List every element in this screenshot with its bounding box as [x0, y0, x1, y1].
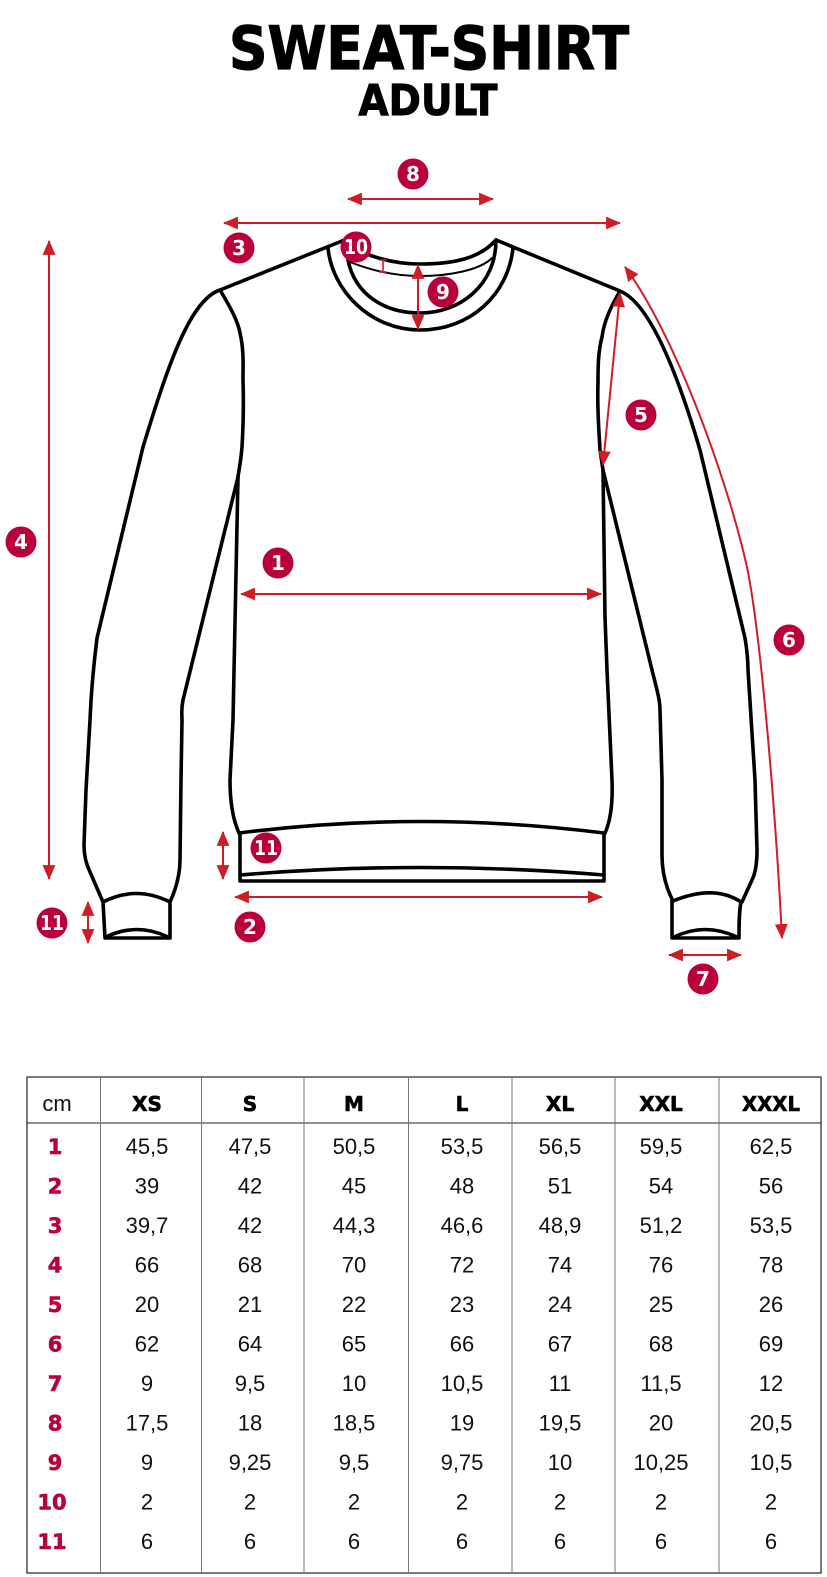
badge 9 [428, 276, 458, 308]
badge 5: 5 [634, 403, 648, 427]
badge 8: 8 [406, 162, 420, 186]
row 5: 24 [548, 1292, 572, 1317]
row 8: 19,5 [539, 1410, 581, 1436]
row 5: 23 [450, 1292, 474, 1317]
row 9 [48, 1450, 792, 1475]
row 1: 47,5 [229, 1134, 271, 1159]
row 10: 10 [37, 1490, 67, 1514]
row 6 [48, 1332, 783, 1356]
badge 4: 4 [14, 530, 28, 554]
row 1: 62,5 [750, 1134, 792, 1159]
table header: XXL [639, 1092, 683, 1116]
row 11: 6 [554, 1529, 566, 1554]
row 11: 6 [456, 1529, 468, 1554]
row 6: 65 [342, 1332, 366, 1356]
table header: S [243, 1092, 257, 1116]
row 2: 54 [649, 1174, 673, 1198]
row 11: 6 [348, 1529, 360, 1554]
row 11 [37, 1529, 777, 1554]
row 3: 53,5 [750, 1213, 792, 1238]
row 10: 2 [456, 1490, 468, 1514]
row 3: 42 [238, 1213, 262, 1238]
row 3 [48, 1213, 792, 1238]
size table [27, 1077, 821, 1573]
row 8 [48, 1410, 792, 1436]
arrow: 9 neck drop [417, 265, 419, 329]
row 9: 9,75 [441, 1450, 483, 1475]
arrow: 7 cuff width [669, 954, 741, 956]
badge 6 [774, 624, 804, 656]
row 7: 9,5 [235, 1371, 265, 1396]
badge 1 [262, 548, 294, 578]
table header: XXXL [742, 1092, 800, 1116]
row 1: 59,5 [640, 1134, 682, 1159]
row 7: 9 [141, 1371, 153, 1396]
arrow: 3 shoulder width [224, 222, 620, 224]
row 9: 9,25 [229, 1450, 271, 1475]
badge 9: 9 [436, 280, 450, 304]
row 7: 10 [342, 1371, 366, 1396]
arrow: 11 cuff height [87, 902, 89, 943]
row 4 [48, 1252, 783, 1278]
row 7: 7 [48, 1372, 62, 1396]
row 8: 20,5 [750, 1410, 792, 1436]
row 1: 53,5 [441, 1134, 483, 1159]
row 4: 76 [649, 1252, 673, 1278]
arrow: 6 sleeve length [625, 267, 782, 938]
badge 11 cuff: 11 [40, 911, 64, 935]
row 9: 9 [48, 1451, 62, 1475]
row 7: 11,5 [640, 1371, 682, 1396]
row 10 [37, 1490, 777, 1514]
row 10: 2 [244, 1490, 256, 1514]
row 8: 17,5 [126, 1410, 168, 1436]
badge 2: 2 [243, 915, 257, 939]
sweatshirt outline [84, 240, 757, 938]
badge 10 [340, 232, 372, 262]
row 3: 39,7 [126, 1213, 168, 1238]
row 2: 2 [48, 1174, 62, 1198]
row 10: 2 [141, 1490, 153, 1514]
row 1: 45,5 [126, 1134, 168, 1159]
badge 10: 10 [344, 235, 368, 259]
row 3: 44,3 [333, 1213, 375, 1238]
row 8: 20 [649, 1410, 673, 1436]
row 6: 64 [238, 1332, 262, 1356]
row 5: 22 [342, 1292, 366, 1317]
badge 6: 6 [782, 628, 796, 652]
badge 7: 7 [696, 967, 710, 991]
row 2: 51 [548, 1174, 572, 1198]
row 8: 18 [238, 1410, 262, 1436]
row 5: 25 [649, 1292, 673, 1317]
table header: XS [132, 1092, 162, 1116]
row 3: 3 [48, 1214, 62, 1238]
arrow: 10 collar height [379, 260, 387, 272]
row 2: 48 [450, 1174, 474, 1198]
arrow: 1 chest width [241, 593, 601, 595]
row 2 [48, 1174, 783, 1198]
row 11: 6 [655, 1529, 667, 1554]
row 10: 2 [554, 1490, 566, 1514]
row 4: 70 [342, 1252, 366, 1278]
row 1: 56,5 [539, 1134, 581, 1159]
row 2: 39 [135, 1174, 159, 1198]
row 5: 26 [759, 1292, 783, 1317]
table header: L [456, 1092, 469, 1116]
row 11: 6 [244, 1529, 256, 1554]
row 5: 21 [238, 1292, 262, 1317]
table header: cm [42, 1091, 72, 1116]
row 4: 72 [450, 1252, 474, 1278]
row 11: 6 [141, 1529, 153, 1554]
row 10: 2 [765, 1490, 777, 1514]
row 1 [48, 1134, 792, 1159]
badge 11 hem: 11 [254, 836, 278, 860]
arrow: 2 hem width [235, 896, 602, 898]
row 10: 2 [655, 1490, 667, 1514]
row 6: 69 [759, 1332, 783, 1356]
row 9: 9,5 [339, 1450, 369, 1475]
row 7: 10,5 [441, 1371, 483, 1396]
badge 3: 3 [232, 236, 246, 260]
row 9: 10 [548, 1450, 572, 1475]
row 6: 68 [649, 1332, 673, 1356]
row 4: 78 [759, 1252, 783, 1278]
row 4: 4 [48, 1254, 62, 1278]
row 10: 2 [348, 1490, 360, 1514]
row 2: 56 [759, 1174, 783, 1198]
arrow: 8 neck width [348, 198, 493, 200]
badge 11 hem [250, 832, 282, 864]
arrow: 5 armhole [603, 293, 620, 465]
table header: XL [546, 1092, 574, 1116]
row 3: 46,6 [441, 1213, 483, 1238]
badge 8 [398, 158, 428, 190]
row 7: 11 [549, 1371, 571, 1396]
row 4: 66 [135, 1252, 159, 1278]
row 2: 42 [238, 1174, 262, 1198]
table header [42, 1091, 800, 1116]
badge 2 [234, 912, 266, 942]
badge 7 [688, 964, 718, 994]
row 1: 50,5 [333, 1134, 375, 1159]
table header: M [344, 1092, 364, 1116]
badge 1: 1 [271, 551, 285, 575]
row 2: 45 [342, 1174, 366, 1198]
row 7 [48, 1371, 783, 1396]
row 9: 10,25 [633, 1450, 689, 1475]
row 6: 62 [135, 1332, 159, 1356]
arrow: 4 body length [48, 241, 50, 879]
row 1: 1 [48, 1135, 62, 1159]
row 9: 9 [141, 1450, 153, 1475]
badge 4 [6, 526, 36, 558]
row 5 [48, 1292, 783, 1317]
arrow: 11 hem height [222, 832, 224, 879]
row 5: 5 [48, 1293, 62, 1317]
row 11: 6 [765, 1529, 777, 1554]
row 11: 11 [37, 1530, 67, 1554]
row 6: 6 [48, 1332, 62, 1356]
row 7: 12 [759, 1371, 783, 1396]
badge 11 cuff [36, 908, 68, 938]
badge 5 [626, 400, 656, 430]
row 4: 74 [548, 1252, 572, 1278]
row 3: 51,2 [640, 1213, 682, 1238]
row 8: 8 [48, 1412, 62, 1436]
row 6: 66 [450, 1332, 474, 1356]
row 8: 18,5 [333, 1410, 375, 1436]
row 8: 19 [450, 1410, 474, 1436]
subtitle: ADULT [358, 76, 498, 126]
row 5: 20 [135, 1292, 159, 1317]
row 4: 68 [238, 1252, 262, 1278]
title: SWEAT-SHIRT [229, 14, 629, 84]
badge 3 [224, 232, 254, 264]
row 6: 67 [548, 1332, 572, 1356]
row 9: 10,5 [750, 1450, 792, 1475]
row 3: 48,9 [539, 1213, 581, 1238]
